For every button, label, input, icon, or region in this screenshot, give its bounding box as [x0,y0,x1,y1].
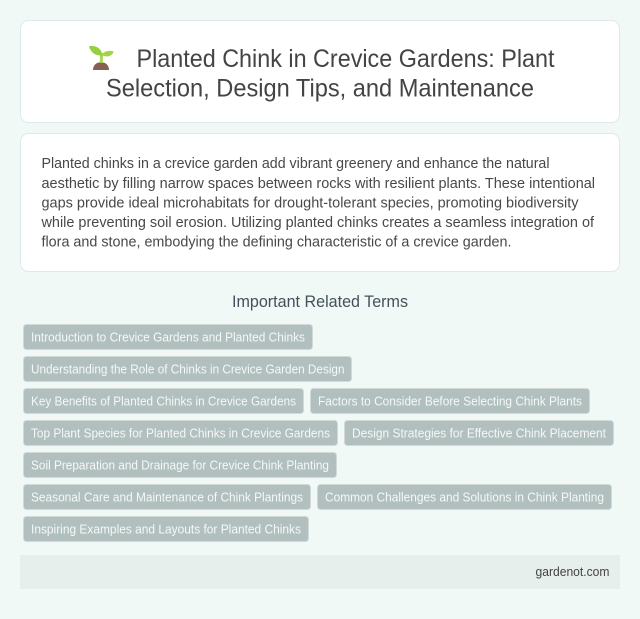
text block: description: aesthetic by filling narrow spaces between rocks with resilient plants. These intentional [42,176,595,192]
text block: description [41,156,595,251]
tag [24,356,352,382]
tag: Factors to Consider Before Selecting Chink Plants [318,394,582,408]
tag [24,388,304,414]
tag [24,324,312,350]
tag [24,516,308,542]
text block: description: Planted chinks in a crevice garden add vibrant greenery and enhance the natural [42,156,550,172]
title [106,46,555,102]
tag [24,420,338,446]
tag: Seasonal Care and Maintenance of Chink Plantings [31,490,303,504]
text block: description: gaps provide ideal microhabitats for drought-tolerant species, promoting biodiversity [42,195,579,211]
tag: Introduction to Crevice Gardens and Planted Chinks [31,330,305,344]
tag [344,420,614,446]
tag [24,484,310,510]
panel: description [20,134,620,272]
footer bar: gardenot.com [536,565,610,579]
text block: description: flora and stone, embodying the defining characteristic of a crevice garden. [42,235,512,251]
tag [318,484,612,510]
text block: description: while preventing soil erosion. Utilizing planted chinks creates a seamless integration of [41,215,595,231]
tag [24,452,336,478]
title: Planted Chink in Crevice Gardens: Plant [136,46,555,73]
tag list [24,324,614,542]
tag: Top Plant Species for Planted Chinks in Crevice Gardens [31,426,330,440]
tag: Design Strategies for Effective Chink Placement [352,426,606,440]
footer bar [20,555,620,589]
tag: Common Challenges and Solutions in Chink Planting [325,490,604,504]
tag: Soil Preparation and Drainage for Crevice Chink Planting [31,458,329,472]
title: Selection, Design Tips, and Maintenance [106,75,534,102]
tag: Inspiring Examples and Layouts for Planted Chinks [31,522,301,536]
tag [310,388,590,414]
heading: related terms: Important Related Terms [232,293,408,311]
tag: Understanding the Role of Chinks in Crevice Garden Design [31,362,344,376]
icon: seedling [89,46,114,70]
tag: Key Benefits of Planted Chinks in Crevice Gardens [31,394,296,408]
panel: header [20,20,620,122]
